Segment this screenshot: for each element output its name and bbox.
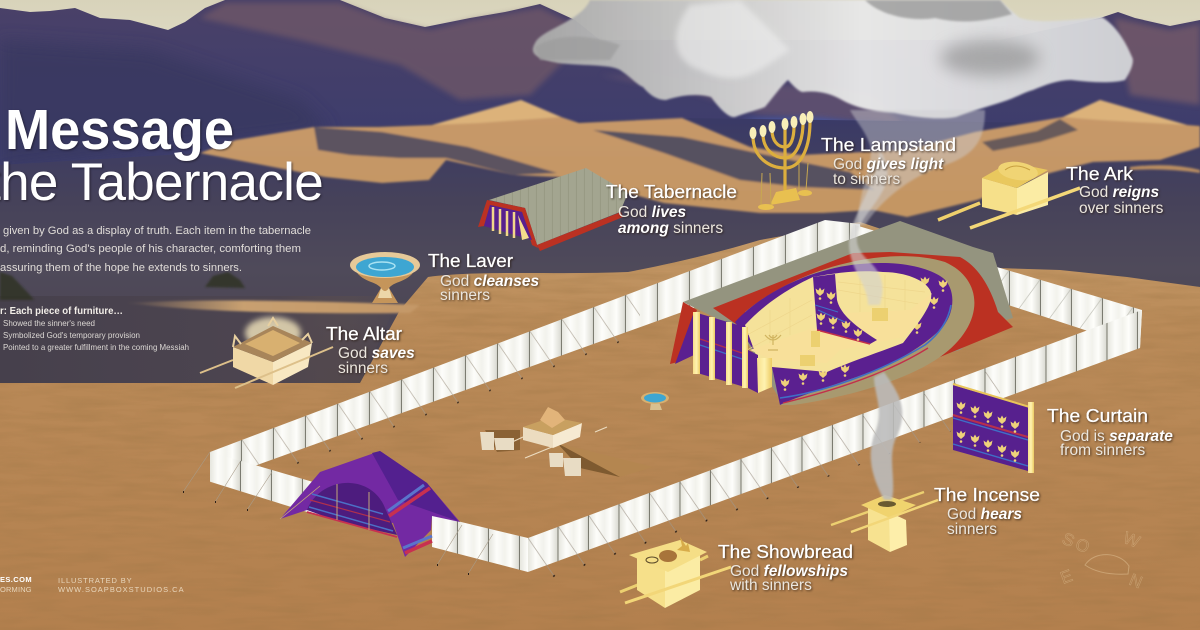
label: the ark <box>1066 164 1164 217</box>
label: the laver <box>428 251 539 304</box>
intro paragraph: d, reminding God's people of his character, comforting them <box>0 243 301 255</box>
main tabernacle cutaway <box>670 221 1013 405</box>
front left red wing <box>670 302 697 364</box>
altar <box>200 317 333 388</box>
label: the ark: The Ark <box>1066 164 1134 184</box>
front left purple wing <box>675 312 694 364</box>
inner veil <box>813 274 877 344</box>
incense smoke <box>871 372 902 500</box>
front entrance curtain <box>694 312 748 388</box>
tabernacle roof <box>683 221 1013 400</box>
furniture list: Pointed to a greater fulfillment in the coming Messiah <box>3 342 189 352</box>
tabernacle interior floor <box>750 293 932 363</box>
ground: rippled sand <box>0 220 1200 630</box>
furniture list: Symbolized God's temporary provision <box>3 330 140 340</box>
background: sky <box>0 0 1200 130</box>
tabernacle skin covering <box>745 256 974 405</box>
showbread table <box>620 537 731 608</box>
label: the incense: The Incense <box>934 485 1040 505</box>
label: the lampstand <box>821 135 956 188</box>
intro paragraph: given by God as a display of truth. Each item in the tabernacle <box>3 225 311 237</box>
curtain stripes <box>780 305 951 398</box>
label: the laver: God cleanses <box>440 273 539 290</box>
bronze oxen figures <box>480 432 581 476</box>
furniture list: r: Each piece of furniture… <box>0 305 123 317</box>
footer credits: ES.COM <box>0 575 33 584</box>
logo drawn in the sand: W <box>1121 528 1145 553</box>
label: the altar: God saves <box>338 345 415 362</box>
mini tabernacle <box>478 168 628 251</box>
label: the lampstand: God gives light <box>833 156 944 173</box>
footer credits: ILLUSTRATED BY <box>58 576 133 585</box>
label: the showbread: The Showbread <box>718 542 853 562</box>
label: the ark: over sinners <box>1079 200 1164 217</box>
title: Message <box>5 98 234 162</box>
courtyard altar and ramp <box>480 407 653 477</box>
tabernacle purple curtain ring <box>735 263 952 405</box>
label: the altar: sinners <box>338 360 388 377</box>
background: lit dunes <box>200 100 1200 217</box>
foreground shadow over the left <box>0 272 420 383</box>
footer credits: ORMING <box>0 585 33 594</box>
background: mountains <box>0 0 1200 210</box>
title <box>0 98 323 212</box>
label: the curtain: from sinners <box>1060 442 1146 459</box>
logo drawn in the sand: E <box>1058 566 1075 588</box>
label: the curtain <box>1047 406 1173 459</box>
label: the incense: God hears <box>947 506 1022 523</box>
interior furniture <box>765 308 888 366</box>
courtyard fence: front left wall <box>183 452 528 574</box>
furniture list: Showed the sinner's need <box>3 318 95 328</box>
label: the incense <box>934 485 1040 538</box>
entrance pillars <box>693 312 772 393</box>
logo drawn in the sand: N <box>1127 570 1148 593</box>
curtain panel <box>953 384 1034 473</box>
furniture list <box>0 305 189 352</box>
label: the curtain: The Curtain <box>1047 406 1148 426</box>
label: the altar: The Altar <box>326 324 402 344</box>
gate stripes <box>389 488 432 553</box>
intro paragraph: assuring them of the hope he extends to sinners. <box>0 262 242 274</box>
courtyard fence: back left wall <box>210 220 860 502</box>
label: the tabernacle <box>606 182 737 237</box>
background: dune shadows <box>0 118 1200 400</box>
label: the lampstand: to sinners <box>833 171 900 188</box>
guy ropes <box>528 363 1000 588</box>
ark of the covenant <box>938 159 1080 228</box>
label: the laver: sinners <box>440 287 490 304</box>
lampstand <box>750 111 814 210</box>
label: the tabernacle: God lives <box>618 204 686 221</box>
smoke column rising from the tabernacle <box>849 110 985 305</box>
gate arch opening <box>307 483 397 535</box>
courtyard gate tent <box>280 451 460 557</box>
label: the showbread <box>718 542 853 594</box>
footer credits: WWW.SOAPBOXSTUDIOS.CA <box>58 585 185 594</box>
label: the lampstand: The Lampstand <box>821 135 956 155</box>
logo drawn in the sand <box>1058 528 1148 593</box>
label: the tabernacle: among sinners <box>618 220 723 237</box>
footer credits <box>0 575 185 594</box>
courtyard fence: front right wall <box>528 310 1142 588</box>
label: the incense: sinners <box>947 521 997 538</box>
tabernacle red covering <box>713 252 1013 380</box>
laver basin <box>350 252 420 303</box>
incense altar <box>831 492 938 552</box>
mini courtyard laver <box>641 392 669 410</box>
label: the showbread: with sinners <box>729 577 812 594</box>
label: the altar <box>326 324 415 377</box>
logo drawn in the sand: SO <box>1060 529 1095 558</box>
interior wall panel lines <box>747 275 925 350</box>
label: the tabernacle: The Tabernacle <box>606 182 737 202</box>
label: the laver: The Laver <box>428 251 513 271</box>
curtain flowers <box>780 276 948 391</box>
courtyard fence: back right wall <box>855 225 1142 348</box>
smoke cloud <box>533 0 1133 118</box>
tabernacle interior walls <box>745 271 931 372</box>
label: the showbread: God fellowships <box>730 563 848 580</box>
label: the curtain: God is separate <box>1060 428 1173 445</box>
label: the ark: God reigns <box>1079 184 1160 201</box>
intro paragraph <box>0 225 311 274</box>
